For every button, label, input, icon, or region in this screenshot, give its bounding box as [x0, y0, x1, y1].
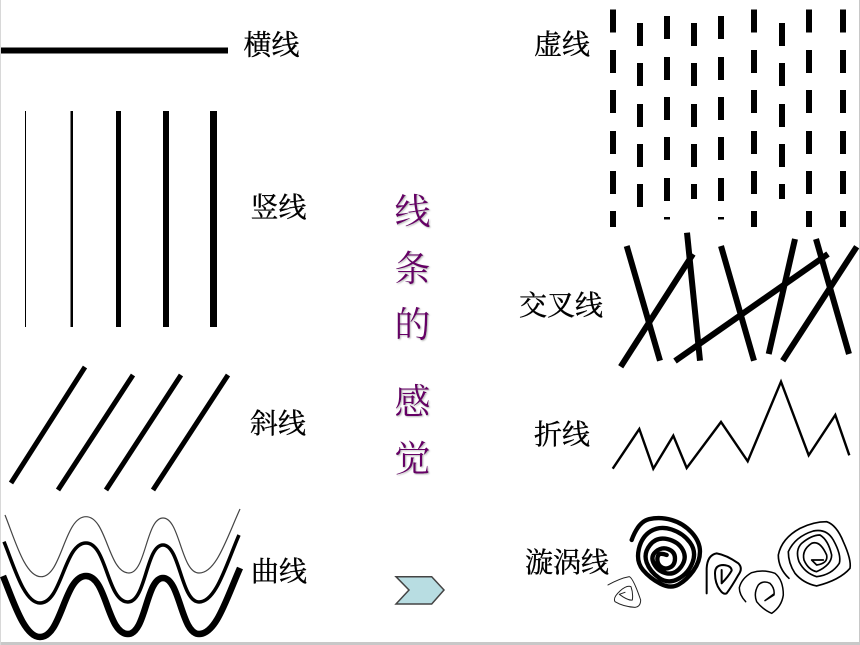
label: dashed line: 虚线 [534, 29, 590, 61]
title: the feeling of lines: 觉 [394, 439, 431, 479]
title: the feeling of lines: 条 [394, 249, 431, 289]
title: the feeling of lines [394, 192, 431, 479]
label: spiral line: 漩涡线 [525, 547, 609, 579]
label: curved line: 曲线 [251, 556, 307, 588]
icon: chevron arrow [396, 577, 444, 604]
crossing lines sample [621, 233, 857, 367]
label: vertical line: 竖线 [250, 192, 307, 224]
horizontal line sample [1, 48, 228, 54]
label: horizontal line: 横线 [244, 30, 300, 62]
diagonal lines sample [11, 367, 228, 490]
label: crossing line: 交叉线 [519, 290, 603, 322]
label: zigzag line: 折线 [534, 419, 590, 451]
dashed lines sample [610, 10, 846, 227]
label: diagonal line: 斜线 [250, 408, 306, 440]
curved lines sample [3, 509, 240, 637]
spiral lines sample [608, 518, 850, 613]
vertical lines sample [25, 111, 217, 327]
title: the feeling of lines: 线 [394, 192, 431, 232]
title: the feeling of lines: 的 [394, 305, 431, 345]
zigzag line sample [613, 382, 849, 469]
title: the feeling of lines: 感 [394, 382, 431, 422]
